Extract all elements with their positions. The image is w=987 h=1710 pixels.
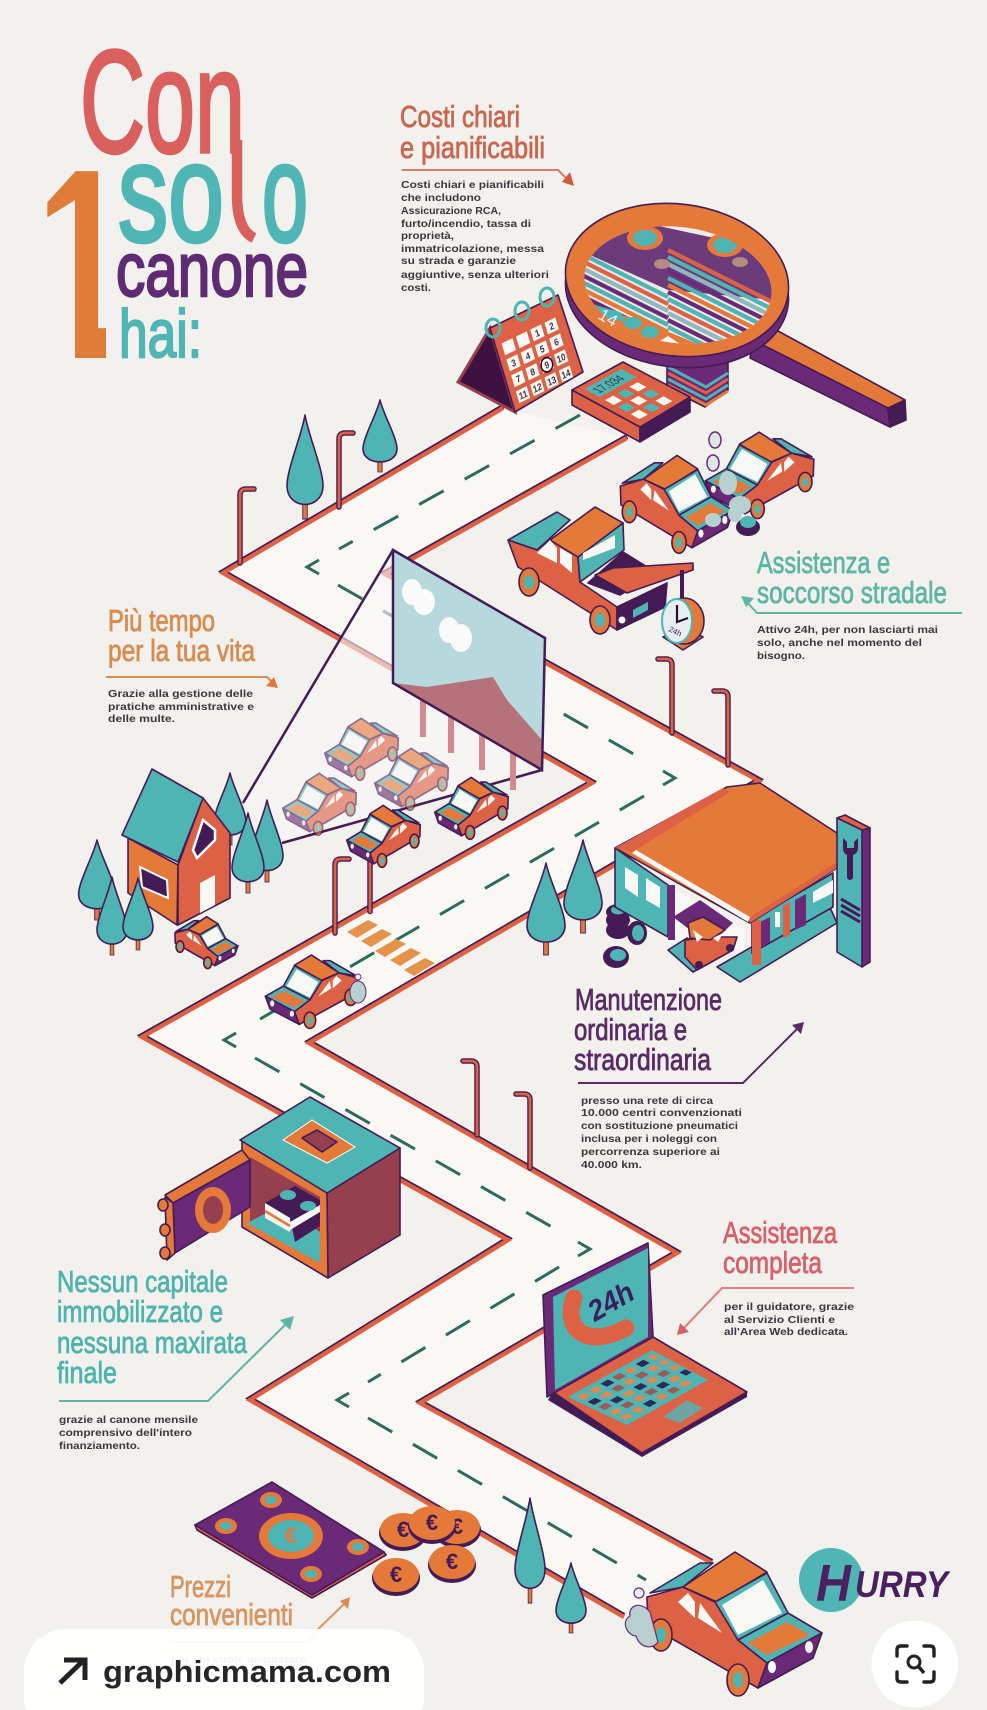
car: pale left: [283, 773, 356, 835]
icon: desk calendar: 6: [553, 336, 560, 348]
title: o: [262, 114, 308, 271]
keyboard keys: [577, 1354, 702, 1420]
billboard legs: [420, 695, 516, 790]
manutenzione text block: 10.000 centri convenzionati: [581, 1107, 742, 1119]
assistenza completa text block: Assistenza: [723, 1215, 838, 1250]
più tempo text block: pratiche amministrative e: [108, 701, 254, 713]
cash stacks in safe: [265, 1186, 320, 1242]
icon: laptop: [543, 1243, 747, 1457]
assistenza e soccorso text block: [741, 545, 962, 662]
icon: safe: [158, 1097, 400, 1278]
icon: euro coins: €: [390, 1562, 402, 1587]
crosswalk: [347, 920, 435, 976]
prezzi convenienti text block: Prezzi: [170, 1569, 231, 1604]
icon: magnifying glass: 14: [595, 305, 621, 331]
costi chiari text block: e pianificabili: [400, 130, 545, 165]
manutenzione text block: percorrenza superiore ai: [581, 1146, 720, 1158]
manutenzione text block: 40.000 km.: [581, 1159, 642, 1171]
trees along the road: [287, 400, 602, 1633]
icon: desk calendar: 8: [529, 366, 536, 378]
assistenza completa text block: completa: [723, 1245, 823, 1280]
manutenzione text block: Manutenzione: [575, 982, 722, 1017]
title: [47, 48, 306, 359]
manutenzione text block: ordinaria e: [574, 1012, 687, 1047]
title: Con: [80, 20, 245, 183]
car: pale middle: [375, 748, 448, 810]
car: pale back: [325, 718, 398, 780]
icon: euro coins: €: [397, 1517, 409, 1542]
road: [142, 406, 759, 1617]
nessun capitale text block: nessuna maxirata: [57, 1325, 248, 1360]
costi chiari text block: su strada e garanzie: [401, 255, 516, 267]
icon: desk calendar: 13: [546, 374, 557, 388]
costi chiari text block: Assicurazione RCA,: [401, 205, 501, 217]
smoke and bubbles: [705, 432, 760, 536]
icon: calculator: 17.034: [589, 373, 629, 395]
assistenza completa text block: [677, 1215, 854, 1338]
title: hai:: [119, 296, 202, 372]
nessun capitale text block: finale: [57, 1355, 117, 1390]
manutenzione text block: inclusa per i noleggi con: [581, 1133, 717, 1145]
icon: magnifying glass: [557, 191, 906, 427]
icon: desk calendar: 7: [515, 373, 522, 385]
trees beside house: [79, 840, 153, 955]
più tempo text block: Più tempo: [108, 603, 215, 638]
costi chiari text block: proprietà,: [401, 230, 454, 242]
nessun capitale text block: comprensivo dell'intero: [59, 1427, 192, 1439]
icon: desk calendar: [458, 288, 583, 412]
source pill: graphicmama.com: [103, 1654, 391, 1689]
assistenza completa text block: per il guidatore, grazie: [724, 1301, 854, 1313]
manutenzione text block: presso una rete di circa: [581, 1095, 713, 1107]
phone icon: [571, 1298, 626, 1337]
icon: link arrow: [60, 1660, 85, 1683]
icon: 24h stopwatch: 24h: [667, 625, 683, 638]
car on road with smoke: [265, 955, 366, 1028]
hurry logo: [799, 1548, 951, 1613]
più tempo text block: [106, 603, 278, 725]
icon: 24h stopwatch: [662, 570, 704, 650]
billboard dream cone: [243, 550, 545, 843]
street lamps: [240, 433, 728, 1168]
car: right crashed: [705, 432, 814, 519]
icon: desk calendar: 10: [556, 351, 567, 365]
assistenza completa text block: all'Area Web dedicata.: [724, 1326, 848, 1338]
hurry logo: H: [816, 1555, 852, 1613]
wrench sign: [837, 815, 870, 967]
nessun capitale text block: finanziamento.: [59, 1440, 140, 1452]
icon: euro coins: [372, 1506, 481, 1596]
icon: desk calendar: 14: [560, 367, 572, 381]
nessun capitale text block: Nessun capitale: [57, 1264, 228, 1299]
title: canone: [116, 228, 308, 313]
costi chiari text block: Costi chiari: [400, 99, 520, 134]
tyres: [603, 904, 647, 968]
nessun capitale text block: immobilizzato e: [57, 1294, 223, 1329]
icon: desk calendar: 4: [524, 350, 532, 362]
icon: tow truck: [508, 507, 693, 634]
assistenza e soccorso text block: Attivo 24h, per non lasciarti mai: [757, 624, 938, 636]
icon: desk calendar: 12: [532, 381, 543, 395]
icon: desk calendar: 1: [534, 327, 541, 339]
car near house: [175, 917, 238, 969]
costi chiari text block: costi.: [401, 282, 431, 294]
più tempo text block: per la tua vita: [108, 633, 256, 668]
costi chiari text block: [400, 99, 574, 294]
prezzi convenienti text block: per chi vuole acquistare: [171, 1654, 306, 1666]
trees behind house: [214, 773, 283, 893]
car: front: [347, 805, 420, 867]
car: right: [435, 777, 508, 839]
icon: desk calendar: 5: [539, 343, 546, 355]
assistenza e soccorso text block: Assistenza e: [757, 545, 890, 580]
icon: banknote: €: [285, 1523, 297, 1548]
icon: garage: [603, 783, 870, 982]
icon: house: [122, 769, 230, 925]
manutenzione text block: con sostituzione pneumatici: [581, 1120, 738, 1132]
icon: euro coins: €: [426, 1510, 438, 1535]
assistenza e soccorso text block: solo, anche nel momento del: [757, 637, 922, 649]
title: so: [118, 114, 224, 271]
hero car with smoke: [625, 1552, 822, 1696]
icon: desk calendar: 2: [548, 320, 555, 332]
assistenza completa text block: al Servizio Clienti e: [724, 1314, 835, 1326]
parked cars: [283, 718, 508, 867]
prezzi convenienti text block: [170, 1569, 350, 1666]
source pill: [24, 1629, 424, 1710]
manutenzione text block: [574, 982, 804, 1171]
costi chiari text block: Costi chiari e pianificabili: [401, 179, 544, 191]
icon: calculator: [572, 362, 690, 442]
costi chiari text block: immatricolazione, messa: [401, 243, 544, 255]
small car in garage: [685, 917, 737, 970]
più tempo text block: delle multe.: [108, 713, 175, 725]
car: left crashed: [620, 455, 733, 553]
costi chiari text block: aggiuntive, senza ulteriori: [401, 269, 549, 281]
assistenza e soccorso text block: bisogno.: [757, 650, 805, 662]
manutenzione text block: straordinaria: [574, 1042, 712, 1077]
crashed cars: [620, 432, 814, 553]
nessun capitale text block: [57, 1264, 294, 1452]
icon: cash stack under magnifier: [667, 362, 728, 407]
billboard panel: [393, 550, 545, 770]
title: 1: [38, 115, 126, 415]
icon: laptop: 24h: [582, 1276, 640, 1329]
visual search button: [872, 1620, 958, 1708]
prezzi convenienti text block: convenienti: [170, 1597, 293, 1632]
hurry logo: URRY: [855, 1564, 951, 1605]
nessun capitale text block: grazie al canone mensile: [59, 1414, 198, 1426]
icon: banknote: [195, 1482, 386, 1598]
icon: euro coins: €: [451, 1514, 463, 1539]
costi chiari text block: furto/incendio, tassa di: [401, 218, 531, 230]
costi chiari text block: che includono: [401, 192, 481, 204]
icon: desk calendar: 9: [543, 359, 551, 371]
icon: desk calendar: 3: [510, 357, 517, 369]
icon: euro coins: €: [446, 1549, 458, 1574]
più tempo text block: Grazie alla gestione delle: [108, 688, 253, 700]
icon: desk calendar: 11: [518, 388, 529, 402]
